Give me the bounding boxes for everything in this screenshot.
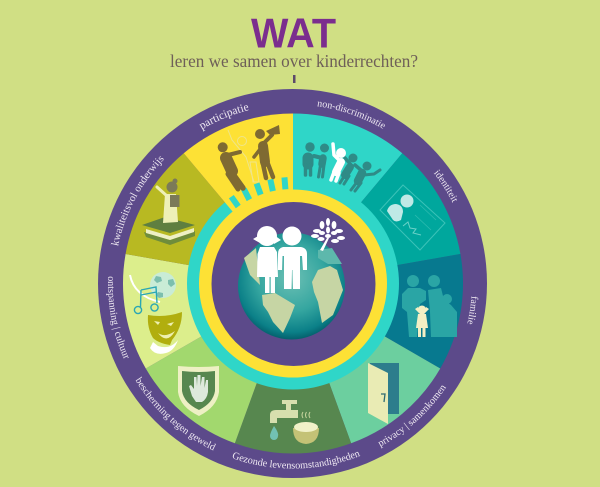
label: Gezonde levensomstandigheden: Gezonde levensomstandigheden (232, 452, 360, 469)
label: non-discriminatie: non-discriminatie (317, 102, 385, 128)
icon: children (253, 226, 307, 293)
label: familie: familie (468, 296, 478, 324)
participatie segment (184, 83, 377, 284)
segment labels (106, 102, 478, 469)
yellow ring (199, 190, 387, 378)
continent: Eurasia haze (318, 248, 342, 264)
continent: Africa (312, 266, 343, 323)
subtitle: leren we samen over kinderrechten? (170, 51, 418, 71)
icon: tree (311, 218, 345, 251)
label: identiteit: identiteit (434, 170, 457, 203)
tick mark (293, 75, 296, 83)
icon: privacy door (368, 363, 399, 424)
label: bescherming tegen geweld: bescherming tegen geweld (136, 376, 216, 450)
label: privacy | samenkomen: privacy | samenkomen (378, 386, 446, 448)
icon: identiteit card (380, 185, 445, 250)
icon: participatie people (218, 125, 280, 189)
icon: non-discriminatie people (305, 142, 380, 191)
child (415, 306, 429, 337)
boy (278, 226, 307, 289)
continent: South America (262, 293, 295, 333)
globe (238, 232, 345, 340)
continent: North America (244, 248, 260, 285)
wheel segments (91, 114, 486, 481)
outer purple ring (98, 89, 487, 478)
label: kwaliteitsvol onderwijs: kwaliteitsvol onderwijs (110, 156, 164, 246)
teal ring (187, 178, 399, 390)
icon: shield with hand (178, 366, 219, 416)
label: ontspanning | cultuur: ontspanning | cultuur (106, 276, 129, 359)
title: WAT (251, 10, 336, 56)
teal dashes (229, 177, 288, 208)
central purple disc (212, 202, 376, 366)
label: participatie: participatie (199, 104, 249, 132)
girl (253, 226, 281, 293)
icon: football, music note and mask (130, 272, 182, 354)
icon: familie (402, 275, 457, 337)
icon: water tap and food bowl (270, 400, 319, 444)
icon: girl on books (142, 178, 195, 245)
